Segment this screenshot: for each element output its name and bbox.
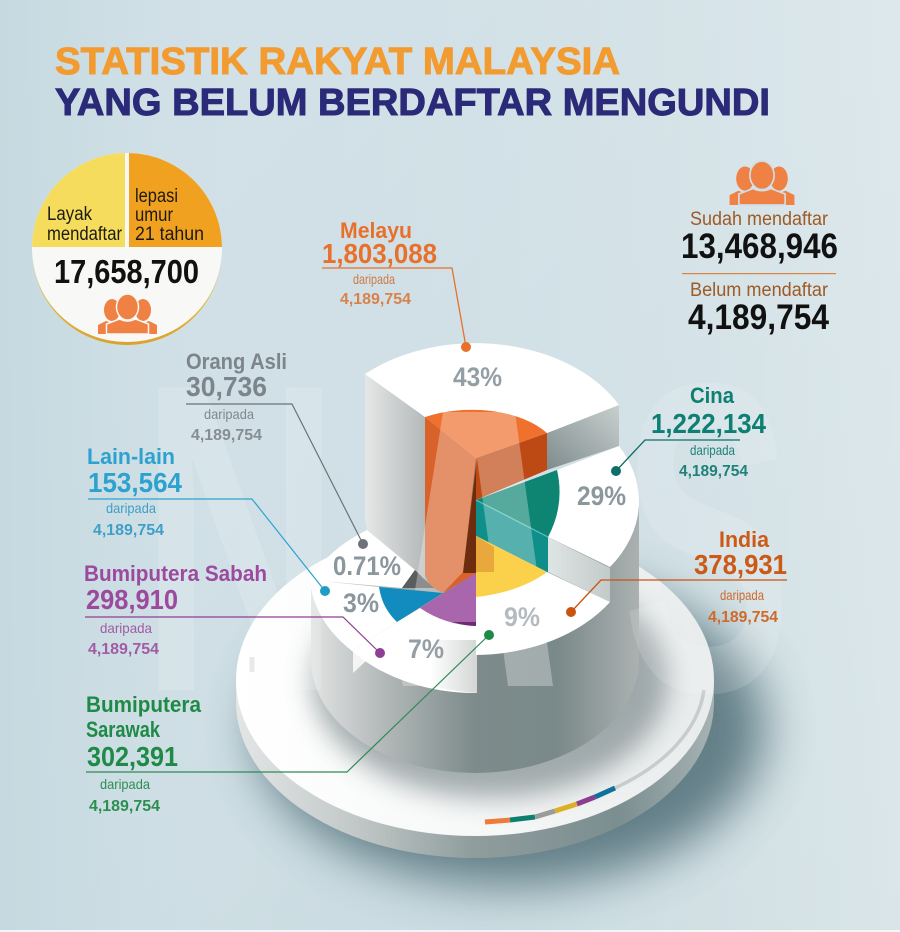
- yellow wedge: [476, 536, 547, 597]
- colour strip on platform: [485, 788, 615, 822]
- label: Lain-lain: Lain-lain: [87, 444, 175, 469]
- label: India: India: [719, 527, 770, 552]
- label: India: 4,189,754: [708, 609, 778, 626]
- label: Orang Asli: daripada: [204, 406, 254, 422]
- total eligible number: 17,658,700: [54, 253, 199, 290]
- label: Cina: 1,222,134: [651, 408, 766, 439]
- sudah mendaftar label: Sudah mendaftar: [690, 209, 829, 230]
- label: Bumiputera Sabah: Bumiputera Sabah: [84, 561, 267, 586]
- label: Melayu: [322, 218, 471, 352]
- label: Orang Asli: Orang Asli: [186, 349, 287, 374]
- label: layak mendaftar: mendaftar: [47, 224, 123, 245]
- leader line: [616, 440, 740, 471]
- label: Orang Asli: [186, 349, 368, 549]
- label: Bumiputera Sarawak: Bumiputera: [86, 692, 202, 717]
- panel: eligible voters pie: [32, 153, 222, 345]
- 3D pie chart: [236, 343, 714, 858]
- label: Bumiputera Sarawak: [86, 630, 494, 815]
- label: lepasi umur 21 tahun: umur: [135, 205, 174, 226]
- value: 0.71%: 0.71%: [333, 551, 401, 581]
- slice: 29 percent: [476, 446, 639, 602]
- purple wedge: [420, 573, 476, 626]
- label: Melayu: daripada: [353, 271, 395, 287]
- title: YANG BELUM BERDAFTAR MENGUNDI: [55, 82, 770, 124]
- label: Orang Asli: 30,736: [186, 371, 267, 402]
- label: Lain-lain: daripada: [106, 500, 156, 516]
- label: Cina: Cina: [690, 383, 735, 408]
- belum mendaftar label: Belum mendaftar: [690, 280, 829, 301]
- value: 9%: 9%: [504, 602, 540, 632]
- value: 43%: 43%: [453, 362, 502, 392]
- label: Cina: daripada: [690, 442, 735, 458]
- slice: 9 percent: [476, 536, 610, 655]
- label: Bumiputera Sarawak: 4,189,754: [89, 798, 160, 815]
- label: Lain-lain: [87, 444, 330, 596]
- leader line: [86, 635, 489, 772]
- slice: 43 percent: [365, 343, 619, 593]
- slice: 7 percent: [352, 608, 477, 693]
- label: lepasi umur 21 tahun: lepasi: [135, 186, 178, 207]
- title: STATISTIK RAKYAT MALAYSIA: [55, 41, 620, 83]
- label: India: 378,931: [694, 549, 787, 580]
- label: India: daripada: [720, 587, 764, 603]
- label: lepasi umur 21 tahun: 21 tahun: [135, 224, 204, 245]
- value: 3%: 3%: [343, 588, 379, 618]
- cylinder body: [311, 505, 639, 773]
- label: Bumiputera Sarawak: daripada: [100, 776, 150, 792]
- label: Cina: 4,189,754: [679, 463, 748, 480]
- label: India: [566, 527, 787, 626]
- label: Lain-lain: 4,189,754: [93, 522, 164, 539]
- leader line: [186, 404, 363, 544]
- label: Bumiputera Sabah: [84, 561, 385, 658]
- leader line: [322, 268, 466, 347]
- value: 7%: 7%: [408, 634, 444, 664]
- belum mendaftar number: 4,189,754: [688, 298, 829, 337]
- label: Melayu: 1,803,088: [322, 238, 437, 269]
- label: Bumiputera Sarawak: 302,391: [87, 741, 178, 772]
- leader line: [88, 499, 325, 591]
- label: Orang Asli: 4,189,754: [191, 427, 262, 444]
- sudah mendaftar number: 13,468,946: [681, 227, 838, 266]
- platform drop shadow: [255, 570, 765, 886]
- label: Bumiputera Sarawak: Sarawak: [86, 717, 161, 742]
- label: Melayu: 4,189,754: [340, 291, 411, 308]
- watermark letters: [140, 293, 792, 784]
- label: Bumiputera Sabah: 4,189,754: [88, 641, 159, 658]
- watermark letters: N: [140, 293, 340, 784]
- slice: 0.71 percent: [310, 530, 443, 593]
- icon: people: [98, 294, 157, 334]
- slice: 3 percent: [310, 580, 443, 651]
- label: Cina: [611, 383, 766, 480]
- label: Bumiputera Sabah: daripada: [100, 620, 152, 636]
- label: layak mendaftar: Layak: [47, 204, 92, 225]
- platform: [236, 524, 714, 858]
- title: [55, 41, 770, 124]
- icon: people: [730, 161, 794, 205]
- label: Bumiputera Sabah: 298,910: [86, 584, 178, 615]
- value: 29%: 29%: [577, 481, 626, 511]
- label: Lain-lain: 153,564: [88, 467, 182, 498]
- label: Melayu: Melayu: [340, 218, 412, 243]
- leader line: [85, 617, 380, 653]
- leader line: [571, 580, 787, 612]
- panel: registered totals: [681, 161, 838, 337]
